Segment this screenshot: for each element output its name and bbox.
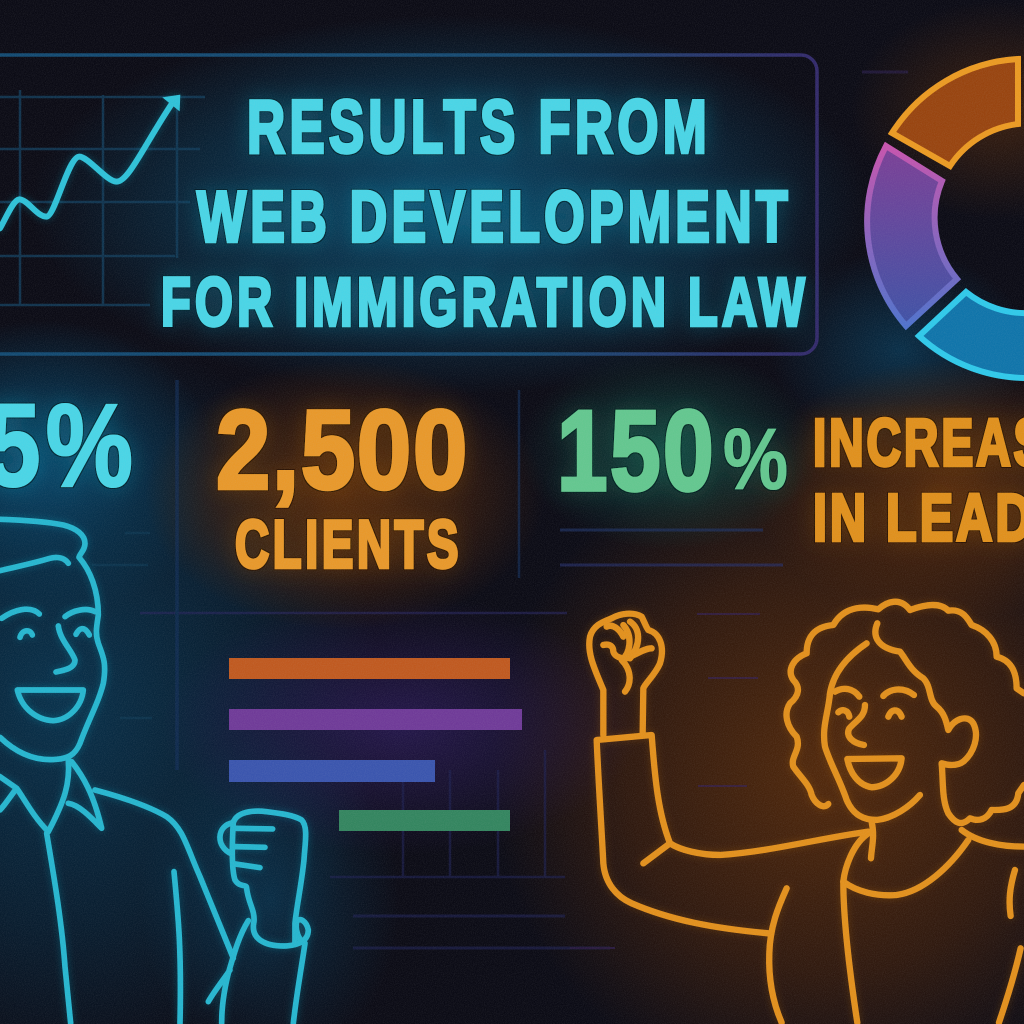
donut segment: purple: [867, 146, 957, 326]
donut segment: blue: [919, 292, 1024, 378]
donut chart: [867, 59, 1024, 378]
percent sign: %: [723, 412, 788, 508]
bar: blue: [229, 760, 435, 782]
line chart with rising arrow: [0, 95, 180, 228]
bar: purple: [229, 709, 522, 730]
label: CLIENTS: [235, 506, 462, 582]
panel: title banner: [0, 55, 817, 354]
bar: orange: [229, 658, 510, 679]
title text: WEB DEVELOPMENT: [197, 176, 792, 258]
stat: 150%: [557, 388, 788, 515]
title text: RESULTS FROM: [247, 84, 711, 168]
stat label: increase in leads (cropped): [813, 406, 1024, 556]
stat: 2,500 clients: [216, 388, 469, 582]
number: 150: [557, 388, 716, 515]
bar: green: [339, 810, 510, 831]
donut segment: orange: [892, 59, 1018, 166]
illustration: smiling man with raised fist: [0, 519, 308, 1023]
bar chart: [229, 658, 522, 831]
illustration: smiling woman with curly hair raising fist: [589, 602, 1024, 1023]
number: 2,500: [216, 388, 469, 512]
title text: [161, 84, 809, 340]
